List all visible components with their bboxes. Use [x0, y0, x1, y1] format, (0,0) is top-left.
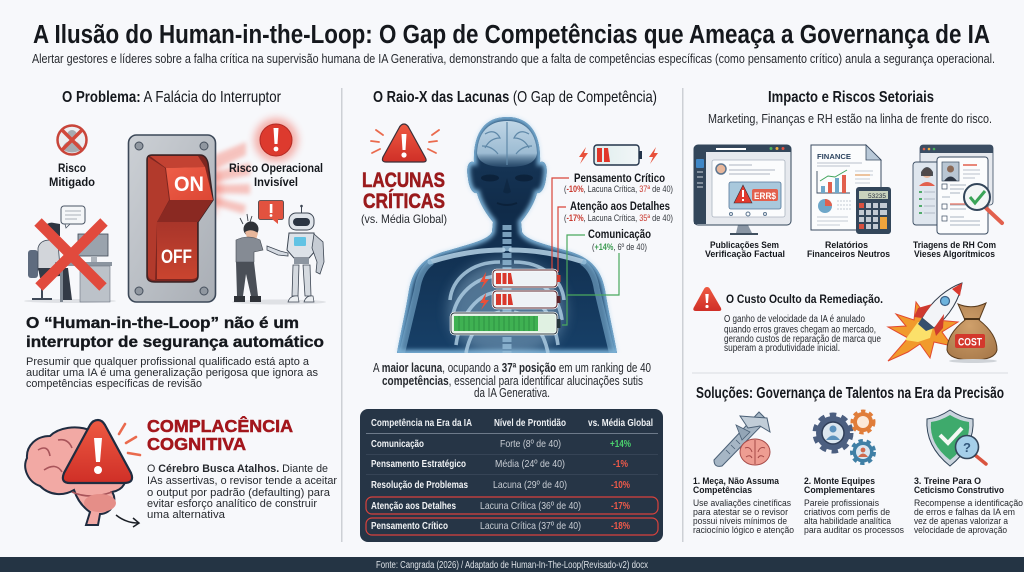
label: risco mitigado: Risco [58, 161, 86, 175]
table row: pensamento estrategico [371, 458, 629, 470]
text block: cerebro busca atalhos: o output por padrão (defaulting) para [147, 487, 331, 499]
text block: presumir [26, 356, 318, 390]
heading: lacunas criticas: CRÍTICAS [363, 190, 445, 213]
table row: resolucao de problemas: Resolução de Problemas [371, 479, 468, 491]
solution 3: de erros e falhas da IA em [914, 507, 1015, 517]
table row: pensamento estrategico: Pensamento Estratégico [371, 458, 466, 470]
label: relatorios financeiros: Financeiros Neutros [807, 249, 890, 260]
icon: alerta custo oculto [693, 287, 721, 311]
table header: Nível de Prontidão [494, 417, 566, 429]
table row: pensamento critico: Pensamento Crítico [371, 520, 448, 532]
text block: custo oculto [724, 314, 881, 354]
label: risco operacional invisivel: Invisível [254, 175, 298, 189]
solution 1: possui níveis mínimos de [693, 516, 787, 526]
table row: atencao aos detalhes: Atenção aos Detalhes [371, 500, 456, 512]
solution 3: vez de apenas valorizar a [914, 516, 1008, 526]
icon: relatorio financeiro e calculadora [811, 145, 891, 234]
solution 3 [914, 476, 1023, 535]
text block: cerebro busca atalhos: O Cérebro Busca Atalhos. Diante de [147, 463, 328, 475]
battery: pensamento critico [480, 270, 560, 289]
table header: Competência na Era da IA [371, 417, 472, 429]
solution 1: raciocínio lógico e atenção [693, 525, 794, 535]
icon: paquimetro e cerebro [714, 412, 770, 466]
solution 1: Competências [693, 485, 752, 495]
panel: impacto e riscos [692, 89, 1023, 535]
label: risco operacional invisivel [229, 161, 323, 189]
solution 3: velocidade de aprovação [914, 525, 1007, 535]
icon: foguete e saco de custo [888, 283, 997, 363]
text block: custo oculto: gerando custos de reparação de marca que [724, 334, 881, 345]
table row: comunicacao: +14% [610, 438, 632, 450]
text block: custo oculto: O ganho de velocidade da IA é anulado [724, 314, 865, 325]
label: relatorios financeiros [807, 240, 890, 260]
label: risco operacional invisivel: Risco Operacional [229, 161, 323, 175]
text block: presumir: Presumir que qualquer profissional qualificado está apto a [26, 356, 310, 368]
solution 2: Pareie profissionais [804, 498, 879, 508]
table row: atencao aos detalhes [371, 500, 631, 512]
solution 3: Recompense a identificação [914, 498, 1023, 508]
solution 2: alta habilidade analítica [804, 516, 891, 526]
table row: atencao aos detalhes: -17% [611, 500, 631, 512]
heading: raio-x: O Raio-X das Lacunas (O Gap de Competência) [373, 89, 657, 106]
label: publicacoes sem verificacao: Verificação Factual [705, 249, 785, 260]
icon: alerta vermelho [254, 118, 298, 162]
label: relatorios financeiros: Relatórios [825, 240, 868, 251]
heading: lacunas criticas: LACUNAS [362, 169, 445, 192]
solution 3: 3. Treine Para O [914, 476, 981, 486]
text block: cerebro busca atalhos [147, 463, 337, 521]
text block: custo oculto: superam a produtividade inicial. [724, 343, 840, 354]
table row: atencao aos detalhes: Lacuna Crítica (36º de 40) [480, 500, 581, 512]
illustration: revisor humano riscado [24, 206, 116, 303]
table header: vs. Média Global [588, 417, 653, 429]
heading: impacto: Impacto e Riscos Setoriais [768, 89, 934, 106]
panel: raio-x [360, 89, 673, 542]
callout: comunicacao: Comunicação [588, 229, 651, 241]
illustration: pessoa angustiada e robo [232, 200, 326, 304]
table row: resolucao de problemas: -10% [611, 479, 631, 491]
label: publicacoes sem verificacao: Publicações Sem [710, 240, 779, 251]
callout: comunicacao [588, 229, 651, 252]
label: OFF: OFF [161, 247, 192, 268]
icon: risco mitigado [58, 126, 86, 154]
solution 1: para atestar se o revisor [693, 507, 788, 517]
battery: atencao aos detalhes [480, 291, 560, 310]
icon: triagem de rh [913, 145, 1002, 234]
heading: complacencia cognitiva: COMPLACÊNCIA [147, 415, 293, 436]
label: risco mitigado: Mitigado [49, 175, 95, 189]
icon: cerebro com alerta [25, 420, 140, 525]
label: ON: ON [174, 173, 204, 196]
callout: atencao aos detalhes: Atenção aos Detalhes [570, 201, 670, 213]
heading: custo oculto: O Custo Oculto da Remediação. [726, 292, 883, 306]
label: publicacoes sem verificacao [705, 240, 785, 260]
text block: custo oculto: quando erros graves chegam ao mercado, [724, 324, 876, 336]
heading: lacunas criticas [361, 169, 447, 226]
icon: relatorio financeiro e calculadora: FINANCE [817, 152, 851, 161]
solution 1: Use avaliações cinetíficas [693, 498, 791, 508]
icon: engrenagens [816, 412, 874, 462]
connector lines [552, 178, 619, 325]
icon: foguete e saco de custo: COST [958, 336, 982, 348]
battery: comunicacao [451, 313, 560, 334]
solution 2 [804, 476, 904, 535]
table: competencias [360, 409, 663, 542]
text block: maior lacuna [373, 361, 651, 400]
heading: human-in-the-loop: O “Human-in-the-Loop” não é um [26, 315, 299, 332]
arrow [116, 515, 139, 527]
heading: human-in-the-loop: interruptor de segurança automático [26, 334, 324, 351]
solution 2: criativos com perfis de [804, 507, 890, 517]
solution 1: 1. Meça, Não Assuma [693, 476, 780, 486]
text block: presumir: competências específicas de revisão [26, 378, 202, 390]
solution 2: Complementares [804, 485, 875, 495]
table row: pensamento estrategico: Média (24º de 40) [495, 458, 565, 470]
callout: comunicacao: (+14%, 6º de 40) [592, 242, 647, 252]
icon: escudo e lupa [927, 410, 986, 466]
solution 1 [693, 476, 794, 535]
heading: lacunas criticas: (vs. Média Global) [361, 212, 447, 226]
callout: atencao aos detalhes [564, 201, 673, 223]
table row: resolucao de problemas: Lacuna (29º de 40) [493, 479, 567, 491]
table row: pensamento critico: Lacuna Crítica (37º de 40) [480, 520, 581, 532]
table row: resolucao de problemas [371, 479, 631, 491]
solution 2: 2. Monte Equipes [804, 476, 875, 486]
label: triagens de rh: Triagens de RH Com [913, 240, 996, 251]
solution 2: para auditar os processos [804, 525, 904, 535]
text block: presumir: auditar uma IA é uma generalização perigosa que ignora as [26, 367, 318, 379]
text block: maior lacuna: A maior lacuna, ocupando a 37ª posição em um ranking de 40 [373, 361, 651, 375]
panel: o problema [24, 89, 337, 527]
icon: monitor com erro [694, 145, 791, 235]
footer: Fonte: Cangrada (2026) / Adaptado de Human-In-The-Loop(Revisado-v2) docx [376, 560, 648, 571]
footer [0, 557, 1024, 572]
icon: interruptor on/off [128, 135, 250, 302]
table row: comunicacao: Comunicação [371, 438, 424, 450]
callout: pensamento critico: (-10%, Lacuna Crítica, 37ª de 40) [564, 184, 673, 194]
text block: cerebro busca atalhos: evitar esforço analítico de construir [147, 498, 317, 510]
heading: o problema: O Problema: A Falácia do Interruptor [62, 89, 282, 106]
text block: maior lacuna: da IA Generativa. [474, 386, 550, 400]
icon: triangulo de alerta lacunas [371, 124, 439, 162]
table row: pensamento estrategico: -1% [613, 458, 629, 470]
text block: maior lacuna: competências, essencial para identificar alucinações sutis [382, 374, 643, 388]
illustration: corpo em raio-x [397, 117, 617, 360]
heading: human-in-the-loop [26, 315, 324, 351]
label: triagens de rh: Vieses Algorítmicos [914, 249, 995, 260]
label: triagens de rh [913, 240, 996, 260]
text block: cerebro busca atalhos: IAs assertivas, o revisor tende a aceitar [147, 475, 337, 487]
table row: pensamento critico [371, 520, 631, 532]
table row: pensamento critico: -18% [611, 520, 631, 532]
text block: cerebro busca atalhos: uma alternativa [147, 509, 226, 521]
icon: escudo e lupa: ? [963, 440, 971, 455]
table row: comunicacao [371, 438, 632, 450]
callout: pensamento critico: Pensamento Crítico [574, 173, 665, 185]
solution 3: Ceticismo Construtivo [914, 485, 1004, 495]
label: risco mitigado [49, 161, 95, 189]
table row: comunicacao: Forte (8º de 40) [500, 438, 561, 450]
heading: complacencia cognitiva [147, 415, 293, 454]
icon: monitor com erro: ERR$ [754, 191, 776, 201]
icon: relatorio financeiro e calculadora: 53235 [868, 193, 886, 200]
callout: pensamento critico [564, 173, 673, 194]
table header [371, 417, 653, 429]
callout: atencao aos detalhes: (-17%, Lacuna Crítica, 35ª de 40) [564, 213, 673, 223]
icon: bateria fraca [579, 145, 658, 165]
heading: complacencia cognitiva: COGNITIVA [147, 434, 246, 454]
